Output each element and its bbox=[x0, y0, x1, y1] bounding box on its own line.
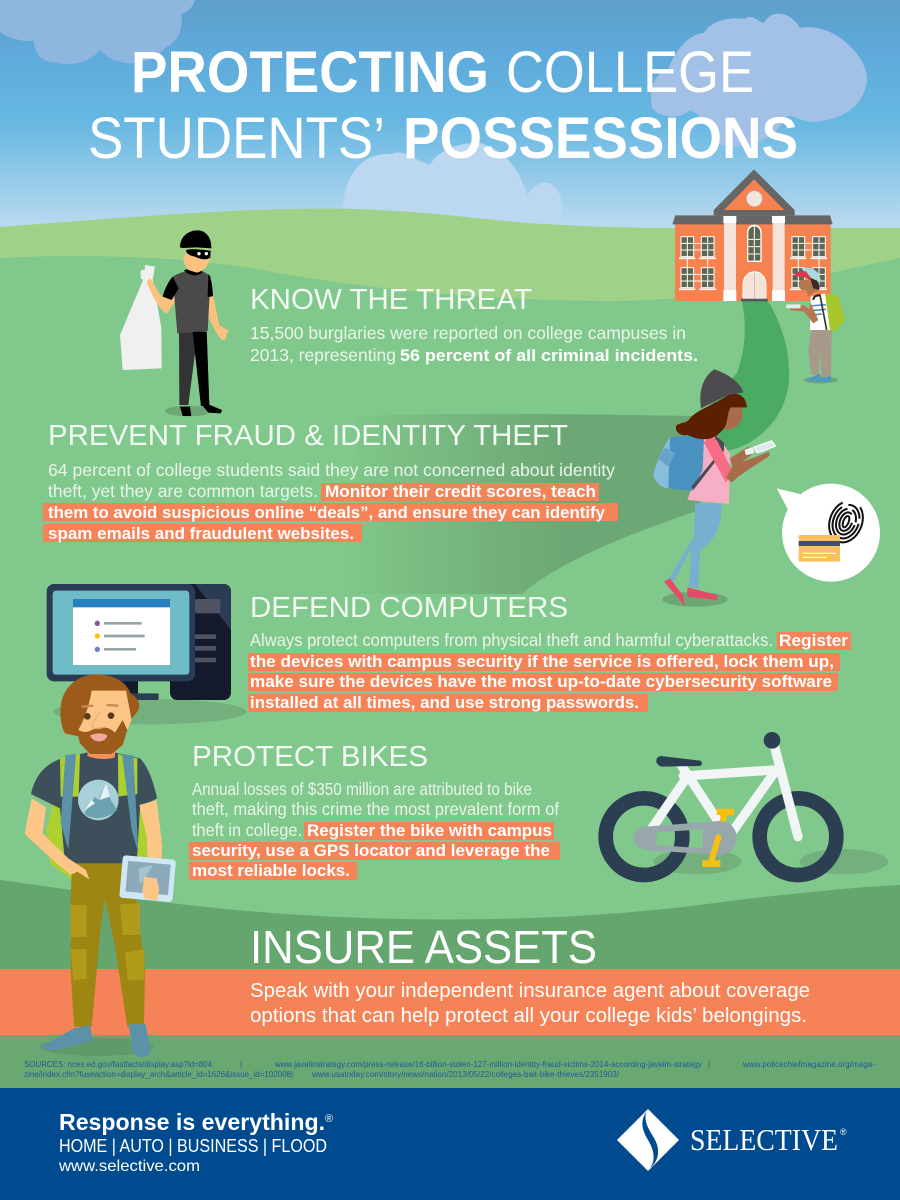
body text: the devices with campus security if the service is offered, lock them up, bbox=[250, 653, 834, 671]
title: STUDENTS’ bbox=[88, 106, 385, 171]
man with beard and tablet bbox=[25, 674, 176, 1057]
body text: Always protect computers from physical theft and harmful cyberattacks. bbox=[250, 630, 773, 650]
body text: make sure the devices have the most up-to-date cybersecurity software bbox=[250, 673, 832, 691]
footer tagline bbox=[58, 1109, 333, 1175]
heading: PROTECT BIKES bbox=[192, 741, 428, 773]
title: COLLEGE bbox=[506, 40, 754, 105]
sources: www.policechiefmagazine.org/maga- bbox=[742, 1060, 875, 1069]
body text bbox=[250, 323, 698, 365]
body text: installed at all times, and use strong passwords. bbox=[250, 694, 639, 712]
body text: options that can help protect all your college kids’ belongings. bbox=[250, 1005, 807, 1027]
body text: Annual losses of $350 million are attributed to bike bbox=[192, 779, 532, 799]
heading: KNOW THE THREAT bbox=[250, 284, 532, 316]
footer tagline: ® bbox=[325, 1113, 333, 1125]
school building bbox=[672, 169, 833, 301]
heading: INSURE ASSETS bbox=[250, 921, 597, 973]
back hill bbox=[0, 209, 900, 400]
sources: | bbox=[291, 1070, 293, 1079]
body text: 64 percent of college students said they are not concerned about identity bbox=[48, 460, 615, 480]
body text: them to avoid suspicious online “deals”, and ensure they can identify bbox=[48, 504, 606, 522]
background: sky bbox=[0, 0, 900, 240]
footer tagline: Response is everything. bbox=[59, 1109, 325, 1135]
heading: DEFEND COMPUTERS bbox=[250, 592, 568, 624]
body text: Speak with your independent insurance agent about coverage bbox=[250, 980, 810, 1002]
fading shaded path bbox=[340, 414, 700, 594]
icon: credit card bbox=[799, 535, 840, 562]
section: protect bikes bbox=[189, 741, 560, 880]
orange band bbox=[0, 969, 900, 1035]
body text: Monitor their credit scores, teach bbox=[325, 483, 596, 501]
title: PROTECTING bbox=[131, 40, 489, 105]
section: know the threat bbox=[250, 284, 698, 365]
body text: theft in college. bbox=[192, 820, 302, 840]
Selective logo: ® bbox=[840, 1127, 847, 1137]
body text bbox=[250, 980, 810, 1027]
lower dark hill bbox=[0, 880, 900, 1090]
body text: spam emails and fraudulent websites. bbox=[48, 525, 354, 543]
student with red cap bbox=[786, 268, 845, 383]
body text: 2013, representing bbox=[250, 345, 396, 365]
sources bbox=[24, 1060, 875, 1079]
sources: www.javelinstrategy.com/press-release/16-billion-stolen-127-million-identity-fraud-victims-2014-according-javelin-strategy bbox=[274, 1060, 702, 1069]
body text bbox=[43, 460, 618, 543]
dark green walkway bbox=[680, 301, 789, 469]
body text: Register bbox=[779, 632, 849, 650]
body text: security, use a GPS locator and leverage the bbox=[192, 842, 550, 860]
Selective logo bbox=[617, 1109, 847, 1171]
body text: theft, yet they are common targets. bbox=[48, 481, 318, 501]
footer band bbox=[0, 1088, 900, 1200]
body text: Register the bike with campus bbox=[307, 822, 552, 840]
section: insure assets bbox=[250, 921, 810, 1027]
body text: 15,500 burglaries were reported on college campuses in bbox=[250, 323, 686, 343]
bicycle bbox=[606, 732, 888, 875]
body text: theft, making this crime the most prevalent form of bbox=[192, 799, 559, 819]
heading: PREVENT FRAUD & IDENTITY THEFT bbox=[48, 420, 568, 452]
sources: www.usatoday.com/story/news/nation/2013/05/22/colleges-bait-bike-thieves/2351903/ bbox=[311, 1070, 620, 1079]
computer bbox=[47, 584, 247, 724]
body text: most reliable locks. bbox=[192, 862, 350, 880]
section: prevent fraud bbox=[43, 420, 618, 543]
bottom green strip bbox=[0, 1035, 900, 1089]
sources: | bbox=[708, 1060, 710, 1069]
sources: zine/index.cfm?fuseaction=display_arch&article_id=1626&issue_id=102008 bbox=[24, 1070, 292, 1079]
clouds bbox=[0, 0, 867, 235]
Selective logo: SELECTIVE bbox=[690, 1122, 838, 1157]
section: defend computers bbox=[248, 592, 851, 712]
sources: SOURCES: nces.ed.gov/fastfacts/display.asp?id=804 bbox=[24, 1060, 213, 1069]
body text bbox=[248, 630, 851, 712]
footer tagline: HOME | AUTO | BUSINESS | FLOOD bbox=[59, 1136, 327, 1156]
main lawn bbox=[0, 256, 900, 1100]
burglar bbox=[120, 230, 229, 416]
title bbox=[88, 40, 798, 171]
title: POSSESSIONS bbox=[403, 106, 798, 171]
body text bbox=[189, 779, 560, 880]
icon: fingerprint bbox=[823, 496, 869, 547]
sources: | bbox=[240, 1060, 242, 1069]
student with phone and backpack bbox=[653, 369, 776, 607]
speech bubble with fingerprint and card bbox=[777, 484, 880, 582]
body text: 56 percent of all criminal incidents. bbox=[400, 347, 698, 365]
footer tagline: www.selective.com bbox=[58, 1158, 200, 1175]
